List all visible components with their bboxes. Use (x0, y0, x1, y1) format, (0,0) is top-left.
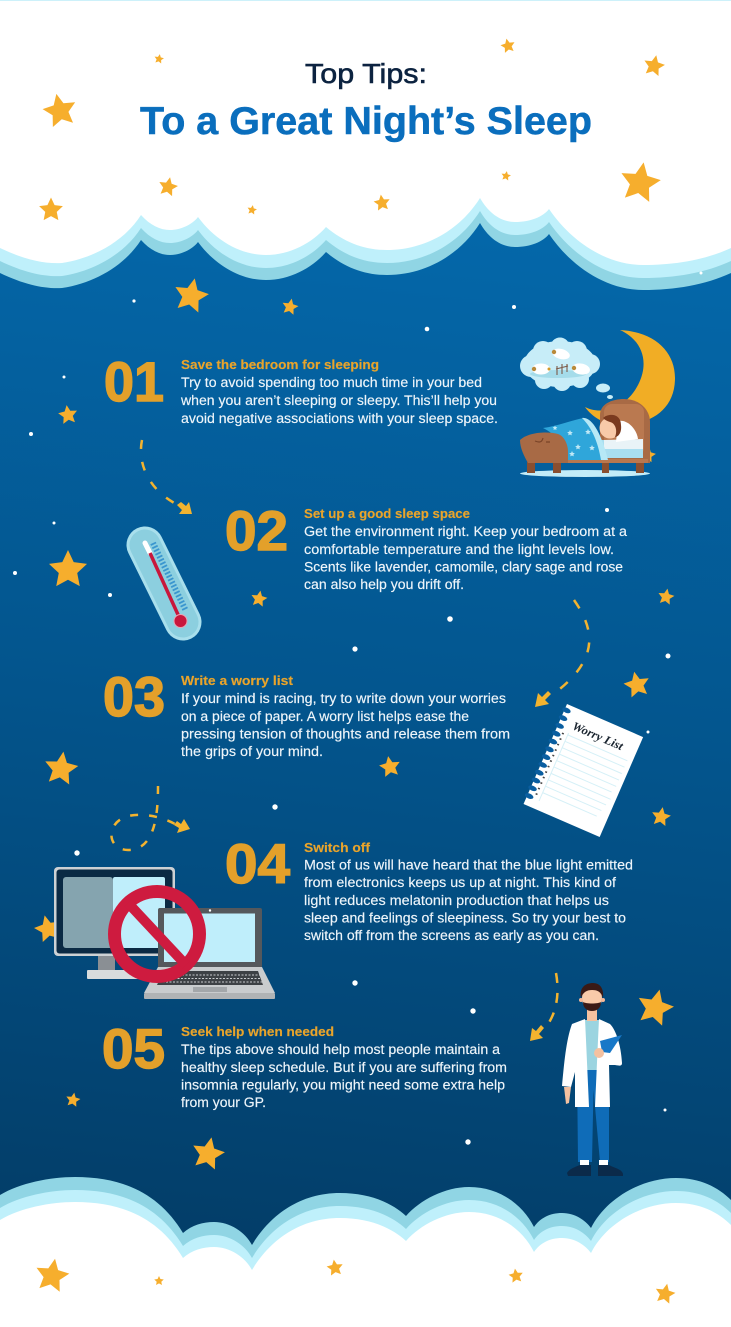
blanket (543, 418, 602, 460)
heading 02: Set up a good sleep space (304, 507, 470, 521)
illustration: thermometer (145, 543, 187, 628)
head (600, 418, 620, 438)
illustration: screens with prohibition sign (54, 867, 275, 999)
neck (587, 1008, 597, 1021)
trousers (577, 1066, 609, 1162)
body 03: pressing tension of thoughts and release them from (181, 726, 510, 742)
heading 03: Write a worry list (181, 674, 294, 688)
hair and beard (581, 983, 603, 998)
body 03: on a piece of paper. A worry list helps ease the (181, 709, 469, 724)
body 05: from your GP. (181, 1095, 266, 1110)
body 05: insomnia regularly, you might need some extra help (181, 1078, 505, 1092)
pillow (616, 421, 638, 442)
tip 04 (225, 832, 633, 943)
clipboard (600, 1035, 622, 1053)
tick marks (153, 543, 186, 611)
body 05: healthy sleep schedule. But if you are suffering from (181, 1060, 507, 1075)
numbering dots (536, 733, 563, 795)
body 01 (180, 375, 498, 426)
right hand (594, 1048, 604, 1058)
number 04: 04 (225, 832, 290, 895)
body 01: avoid negative associations with your sleep space. (181, 411, 498, 426)
body 01: when you aren’t sleeping or sleepy. This’ll help you (180, 393, 497, 408)
body 04: light reduces melatonin production that helps us (304, 893, 609, 908)
tip 03 (103, 665, 510, 759)
night sky panel (0, 190, 731, 1250)
title line 1: Top Tips: (305, 58, 427, 89)
tip 05 (102, 1017, 507, 1110)
left hand (564, 1087, 571, 1104)
body 04: sleep and feelings of sleepiness. So try your best to (304, 910, 626, 926)
icon: crescent moon (585, 330, 675, 425)
title line 2: To a Great Night’s Sleep (140, 100, 592, 143)
rule lines (539, 733, 628, 827)
arrow: tip 3 to tip 4 loop (111, 786, 190, 850)
tip 02 (225, 499, 628, 592)
body 02: Scents like lavender, camomile, clary sage and rose (304, 560, 623, 574)
arrow: tip 4 to tip 5 (530, 973, 558, 1041)
worry list label: Worry List (570, 719, 626, 753)
footboard (520, 432, 568, 463)
body 02 (304, 524, 628, 592)
icon: thought cloud with sheep (520, 338, 613, 399)
body 05: The tips above should help most people maintain a (181, 1042, 501, 1057)
body 02: can also help you drift off. (304, 577, 464, 592)
number 02: 02 (225, 499, 288, 562)
number 01: 01 (104, 350, 164, 413)
head (582, 986, 602, 1010)
heading 01: Save the bedroom for sleeping (181, 358, 379, 372)
body 02: comfortable temperature and the light levels low. (304, 542, 614, 557)
illustration: worry list paper (521, 703, 643, 837)
shoes (567, 1165, 591, 1176)
body 03 (181, 691, 510, 759)
body 04: Most of us will have heard that the blue light emitted (304, 858, 633, 872)
top cloud border (0, 0, 731, 290)
body 04: from electronics keeps us up at night. This kind of (304, 875, 616, 890)
shirt (583, 1020, 600, 1070)
number 05: 05 (102, 1017, 165, 1080)
title (140, 58, 592, 143)
icon: prohibition sign (114, 892, 200, 976)
socks (580, 1160, 589, 1165)
body 02: Get the environment right. Keep your bedroom at a (304, 524, 628, 539)
arrow: tip 2 to tip 3 (535, 600, 589, 707)
mercury column (145, 543, 150, 553)
lab coat (562, 1019, 589, 1107)
body 01: Try to avoid spending too much time in your bed (181, 375, 482, 390)
icon: bed (520, 399, 650, 477)
body 05 (181, 1042, 507, 1110)
body 03: the grips of your mind. (181, 744, 323, 759)
spiral binding (524, 706, 572, 800)
heading 05: Seek help when needed (181, 1025, 334, 1039)
icon: laptop (144, 908, 275, 999)
icon: monitor (54, 867, 175, 979)
illustration: sleeping person, moon and bed (520, 330, 675, 477)
body 04 (304, 858, 633, 943)
bottom cloud border (0, 1177, 731, 1327)
body 04: switch off from the screens as early as you can. (304, 928, 599, 943)
heading 04: Switch off (304, 841, 371, 855)
illustration: doctor (562, 983, 623, 1176)
arrow: tip 1 to tip 2 (141, 440, 192, 514)
body 03: If your mind is racing, try to write down your worries (181, 691, 506, 706)
number 03: 03 (103, 665, 165, 728)
tip 01 (104, 350, 498, 426)
white dots (13, 272, 702, 1145)
